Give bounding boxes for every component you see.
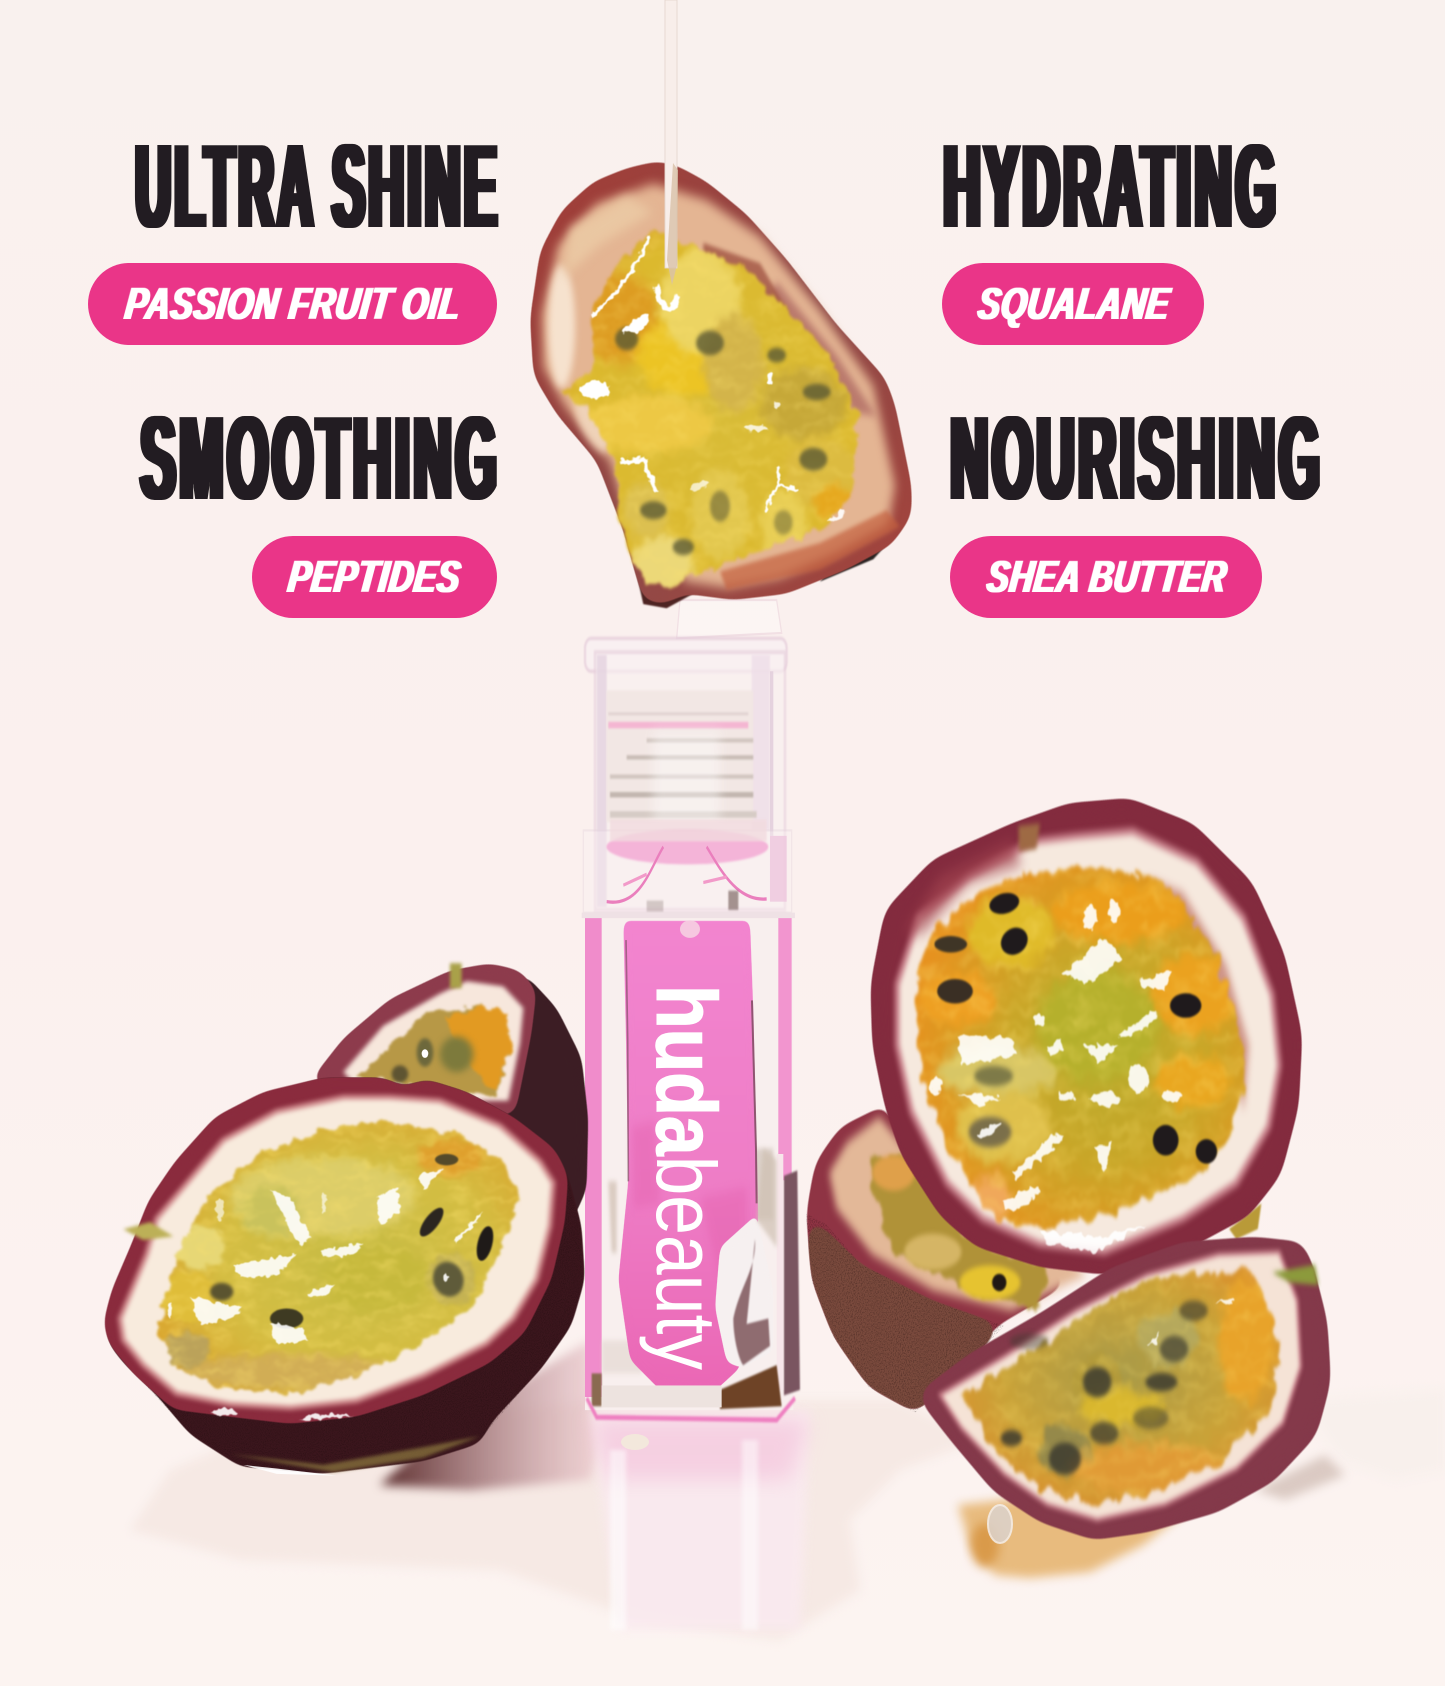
front fruit rim: [103, 1077, 568, 1424]
bottle body: [582, 913, 800, 1410]
table surface and puddle: [130, 1340, 1445, 1640]
big half seeds: [934, 890, 1217, 1164]
pill: PEPTIDES: PEPTIDES: [286, 551, 464, 602]
pale inner rind: [542, 184, 895, 588]
back fruit: [310, 963, 588, 1226]
big half gloss: [931, 899, 1182, 1252]
quarter fruit: [915, 1237, 1331, 1540]
front fruit skin: [105, 1077, 585, 1474]
front fruit white ring: [120, 1097, 553, 1408]
oil drip: [665, 0, 678, 285]
front fruit flesh: [153, 1119, 523, 1401]
lip oil bottle: [582, 600, 800, 1420]
infographic canvas: SMOOTHING: [140, 392, 500, 525]
bottle cap: [585, 600, 787, 910]
pill: SQUALANE: [942, 263, 1204, 345]
seeds: [615, 327, 831, 555]
gloss highlights: [580, 235, 846, 524]
flesh: [560, 228, 862, 591]
right fruit stack: [801, 798, 1331, 1540]
bottle base: [587, 1365, 795, 1420]
back half fruit: [801, 1104, 1086, 1418]
pill: PASSION FRUIT OIL: PASSION FRUIT OIL: [123, 278, 464, 329]
wand reflection: [715, 1148, 777, 1368]
pink neck band: [606, 829, 768, 864]
seeds and gloss: [123, 1154, 496, 1476]
pill: SQUALANE: SQUALANE: [976, 278, 1173, 329]
neck collar: [583, 819, 792, 913]
big upright half: [870, 798, 1302, 1275]
rind: [530, 161, 912, 604]
top passion fruit: [530, 161, 912, 612]
wand applicator: [618, 921, 758, 1395]
pill: SHEA BUTTER: SHEA BUTTER: [985, 551, 1230, 602]
lower-left fruits: [90, 963, 610, 1476]
big half flesh: [911, 862, 1251, 1234]
pill: PASSION FRUIT OIL: [88, 263, 497, 345]
pill: SHEA BUTTER: [950, 536, 1262, 618]
brand text: hudabeauty: hudabeauty: [639, 985, 733, 1370]
cap threads: [607, 691, 757, 825]
pill: PEPTIDES: [252, 536, 497, 618]
infographic canvas: ULTRA SHINE: [136, 120, 500, 253]
